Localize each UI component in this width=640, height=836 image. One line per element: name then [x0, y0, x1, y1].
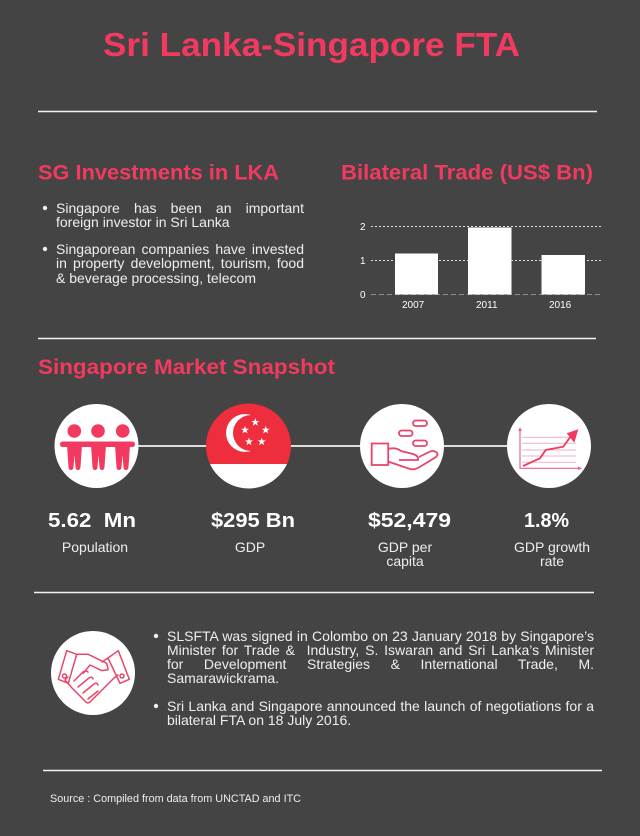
icon: growth chart — [507, 404, 591, 488]
panel: SG investments — [38, 162, 304, 288]
stat: population — [48, 510, 136, 555]
stat: GDP: $295 Bn — [211, 510, 295, 532]
bar chart: 2016 — [549, 300, 572, 311]
bullet list: investments — [43, 200, 304, 288]
bullet list: FTA notes: for Development Strategies & International Trade, M. — [167, 656, 594, 672]
stat: population: Population — [62, 539, 128, 555]
bullet list: investments: in property development, tourism, food — [56, 255, 304, 271]
bar chart: 0 — [360, 290, 366, 301]
bullet list: FTA notes: bilateral FTA on 18 July 2016. — [167, 712, 351, 728]
source note: Source : Compiled from data from UNCTAD and ITC — [50, 793, 301, 805]
stat: GDP growth rate — [514, 510, 590, 569]
stat: GDP per capita: capita — [386, 553, 424, 569]
bar chart — [360, 222, 603, 311]
stat: GDP per capita: $52,479 — [368, 510, 451, 532]
icon: Singapore flag — [205, 403, 292, 490]
icon: population — [54, 404, 138, 488]
bullet list: investments: Singapore has been an important — [56, 200, 304, 216]
bullet list: FTA notes: Samarawickrama. — [167, 670, 279, 686]
bar chart: 2007 — [402, 300, 425, 311]
heading: market snapshot: Singapore Market Snapshot — [38, 356, 335, 379]
heading: SG investments: SG Investments in LKA — [38, 162, 279, 184]
stat: GDP per capita: GDP per — [378, 539, 432, 555]
stat: GDP per capita — [368, 510, 451, 569]
bullet list: FTA notes — [154, 628, 594, 730]
panel: bilateral trade — [341, 162, 603, 311]
bullet list: FTA notes: Sri Lanka and Singapore announced the launch of negotiations for a — [167, 698, 594, 714]
bullet list: FTA notes: Minister for Trade & Industry, S. Iswaran and Sri Lanka’s Minister — [167, 642, 594, 658]
stat: population: 5.62 Mn — [48, 510, 136, 532]
bullet list: FTA notes: SLSFTA was signed in Colombo on 23 January 2018 by Singapore’s — [167, 628, 594, 644]
icon: handshake — [51, 631, 135, 715]
icon: hand with coins — [360, 404, 444, 488]
title: Sri Lanka-Singapore FTA — [103, 26, 520, 63]
stat: GDP growth rate: GDP growth — [514, 539, 590, 555]
bullet list: investments: Singaporean companies have invested — [56, 241, 304, 257]
bar chart: 2 — [360, 222, 366, 233]
bar chart: 1 — [360, 256, 366, 267]
stat: GDP growth rate: 1.8% — [524, 510, 569, 532]
bullet list: investments: & beverage processing, telecom — [56, 270, 256, 286]
heading: bilateral trade: Bilateral Trade (US$ Bn) — [341, 162, 593, 184]
stat: GDP: GDP — [235, 539, 265, 555]
stat: GDP — [211, 510, 295, 555]
stat: GDP growth rate: rate — [540, 553, 564, 569]
bullet list: investments: foreign investor in Sri Lanka — [56, 214, 230, 230]
bar chart: 2011 — [476, 300, 498, 311]
